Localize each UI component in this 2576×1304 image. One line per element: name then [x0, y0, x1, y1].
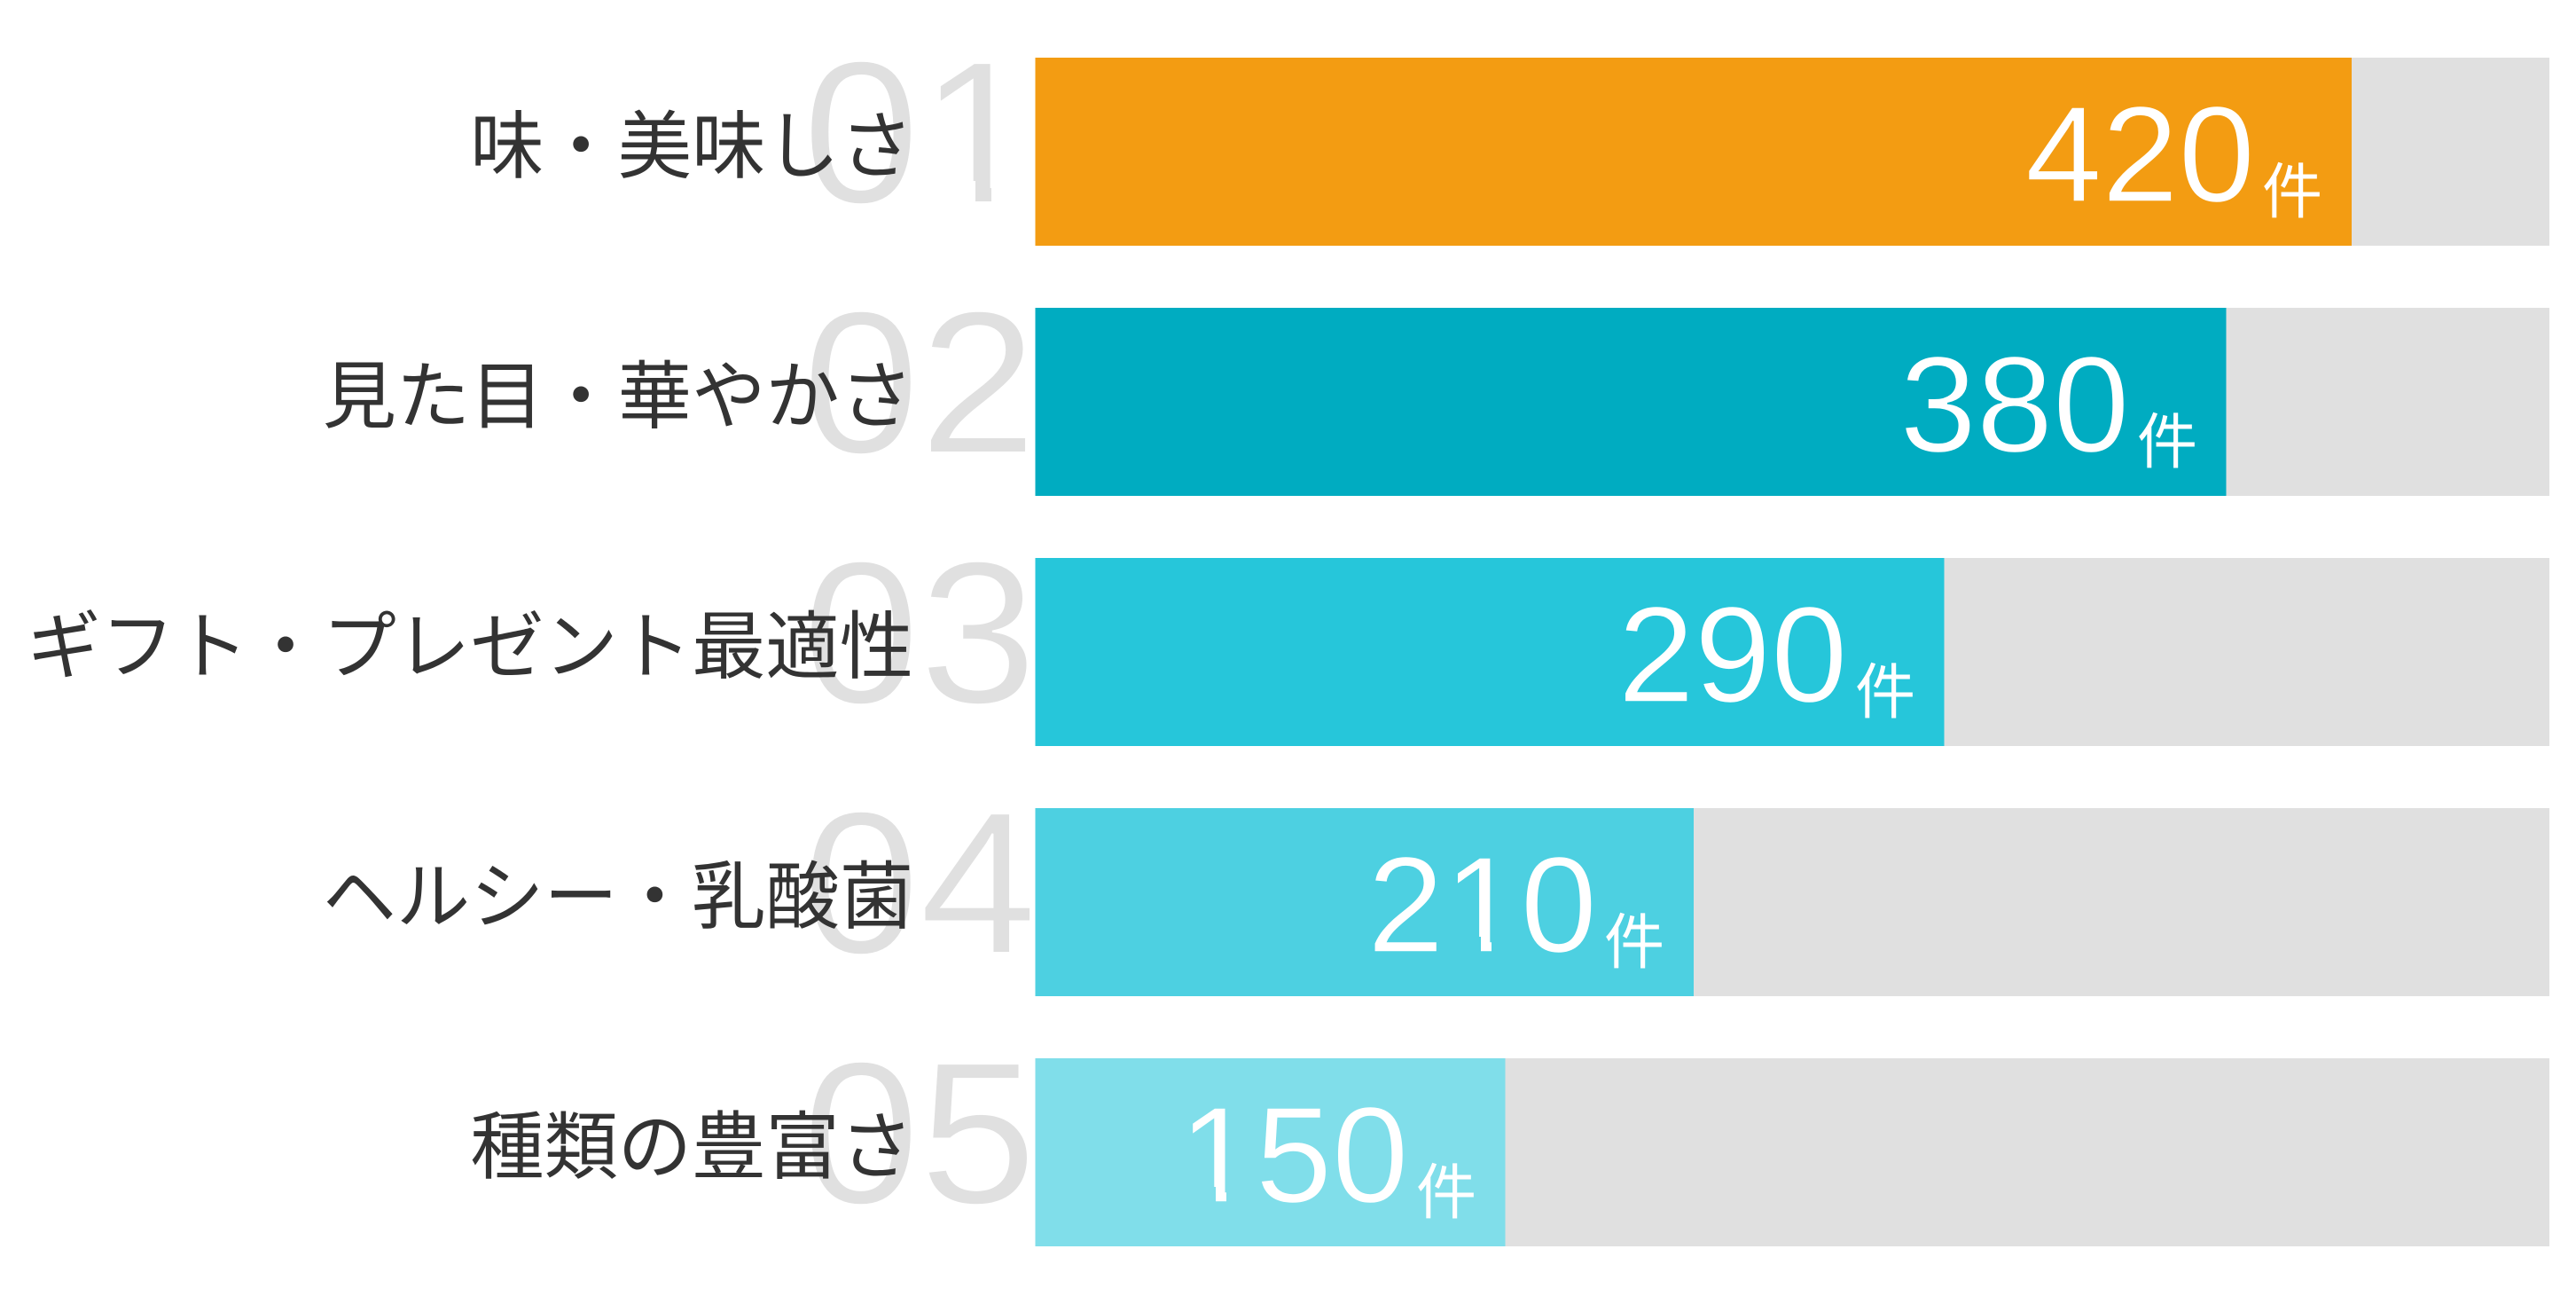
bar: 290	[1036, 558, 1944, 746]
row 3: gift	[27, 521, 2549, 746]
row 2: appearance	[323, 271, 2549, 496]
bar: 150	[1036, 1058, 1506, 1246]
track	[1036, 308, 2549, 496]
label: appearance: 見た目・華やかさ	[323, 356, 913, 438]
row 1: taste	[470, 20, 2549, 246]
track	[1036, 58, 2549, 246]
rank number 05: 05	[803, 1021, 1037, 1246]
label: taste: 味・美味しさ	[470, 106, 913, 188]
rank number 04: 04	[803, 771, 1037, 996]
row 5: variety	[470, 1021, 2549, 1246]
track	[1036, 558, 2549, 746]
value 210: 210	[1367, 829, 1597, 981]
unit: 件	[1416, 1143, 1476, 1231]
unit: 件	[2262, 143, 2322, 231]
track	[1036, 808, 2549, 996]
track	[1036, 1058, 2549, 1246]
bar: 380	[1036, 308, 2226, 496]
bar: 210	[1036, 808, 1694, 996]
unit: 件	[1604, 893, 1664, 981]
label: gift: ギフト・プレゼント最適性	[27, 606, 913, 688]
bar: 420	[1036, 58, 2352, 246]
label: health: ヘルシー・乳酸菌	[323, 856, 913, 939]
rank number 01: 01	[803, 20, 1037, 246]
rank number 02: 02	[803, 271, 1037, 496]
value 420: 420	[2025, 78, 2255, 231]
label: variety: 種類の豊富さ	[470, 1106, 913, 1189]
rank number 03: 03	[803, 521, 1037, 746]
unit: 件	[2137, 393, 2197, 481]
value 380: 380	[1899, 328, 2130, 481]
value 290: 290	[1617, 578, 1848, 731]
unit: 件	[1855, 643, 1915, 731]
value 150: 150	[1179, 1079, 1408, 1231]
row 4: health	[323, 771, 2549, 996]
